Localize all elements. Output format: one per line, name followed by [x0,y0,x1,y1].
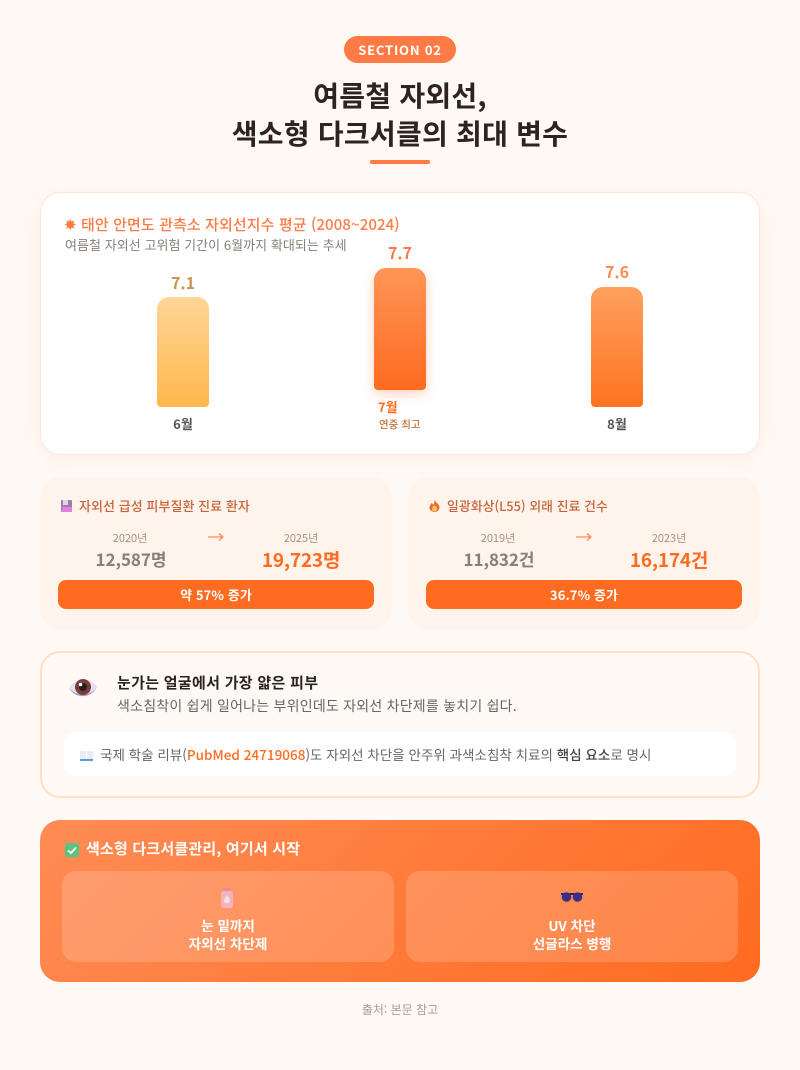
icon: check [65,843,79,857]
2019 value: 11,832건 [464,546,534,571]
tip text: 눈 밑까지 [201,915,255,935]
tip text: 자외선 차단제 [189,933,267,953]
increase bar [58,580,374,609]
2023 value: 16,174건 [630,546,708,573]
source note: 출처: 본문 참고 [362,1001,438,1018]
tip text [189,915,267,953]
icon: sunglasses [561,892,583,902]
callout heading: 눈가는 얼굴에서 가장 얇은 피부 [117,672,318,693]
increase bar [426,580,742,609]
icon: eye [69,679,97,696]
tip text: UV 차단 [548,915,596,935]
2025 value: 19,723명 [262,546,340,573]
June bar [157,297,209,407]
panel: UV patients stat [40,477,392,629]
2023 year: 2023년 [652,530,686,546]
2019 year: 2019년 [481,530,515,546]
panel: sunburn stat [408,477,760,629]
panel heading: 색소형 다크서클관리, 여기서 시작 [86,838,300,859]
reference note box [64,732,736,776]
chart subtitle: 여름철 자외선 고위험 기간이 6월까지 확대되는 추세 [65,235,347,254]
section badge [344,36,456,63]
tip: sunscreen [62,871,394,962]
August bar [591,287,643,407]
title underline [370,160,430,164]
icon: open book [80,751,93,761]
tip text [533,915,611,953]
title: 여름철 자외선, [313,75,487,115]
section badge: SECTION 02 [358,40,442,59]
callout body: 색소침착이 쉽게 일어나는 부위인데도 자외선 차단제를 놓치기 쉽다. [117,696,517,716]
August label: 8월 [607,414,627,433]
panel: eye skin callout [40,651,760,798]
stat heading: 일광화상(L55) 외래 진료 건수 [447,496,608,515]
note text: 국제 학술 리뷰(PubMed 24719068)도 자외선 차단을 안주위 과색소침착 치료의 핵심 요소로 명시 [100,744,651,764]
title: 색소형 다크서클의 최대 변수 [232,113,568,153]
arrow [208,533,224,541]
chart heading: ✸ 태안 안면도 관측소 자외선지수 평균 (2008~2024) [64,214,400,235]
July value: 7.7 [388,240,412,264]
icon: sunscreen bottle [221,888,233,908]
August value: 7.6 [605,259,629,283]
July label: 7월 [378,397,398,416]
icon: floppy [61,500,72,512]
July note: 연중 최고 [379,417,421,432]
June label: 6월 [173,414,193,433]
panel: UV index chart [40,192,760,455]
2020 value: 12,587명 [96,546,166,571]
panel: care start [40,820,760,982]
June value: 7.1 [171,270,195,294]
July bar [374,268,426,390]
2020 year: 2020년 [113,530,147,546]
arrow [576,533,592,541]
icon: fire [430,499,440,512]
increase bar: 36.7% 증가 [550,585,618,604]
2025 year: 2025년 [284,530,318,546]
increase bar: 약 57% 증가 [180,585,252,604]
tip text: 선글라스 병행 [533,933,611,953]
stat heading: 자외선 급성 피부질환 진료 환자 [79,496,250,515]
title [232,75,568,153]
tip: sunglasses [406,871,738,962]
